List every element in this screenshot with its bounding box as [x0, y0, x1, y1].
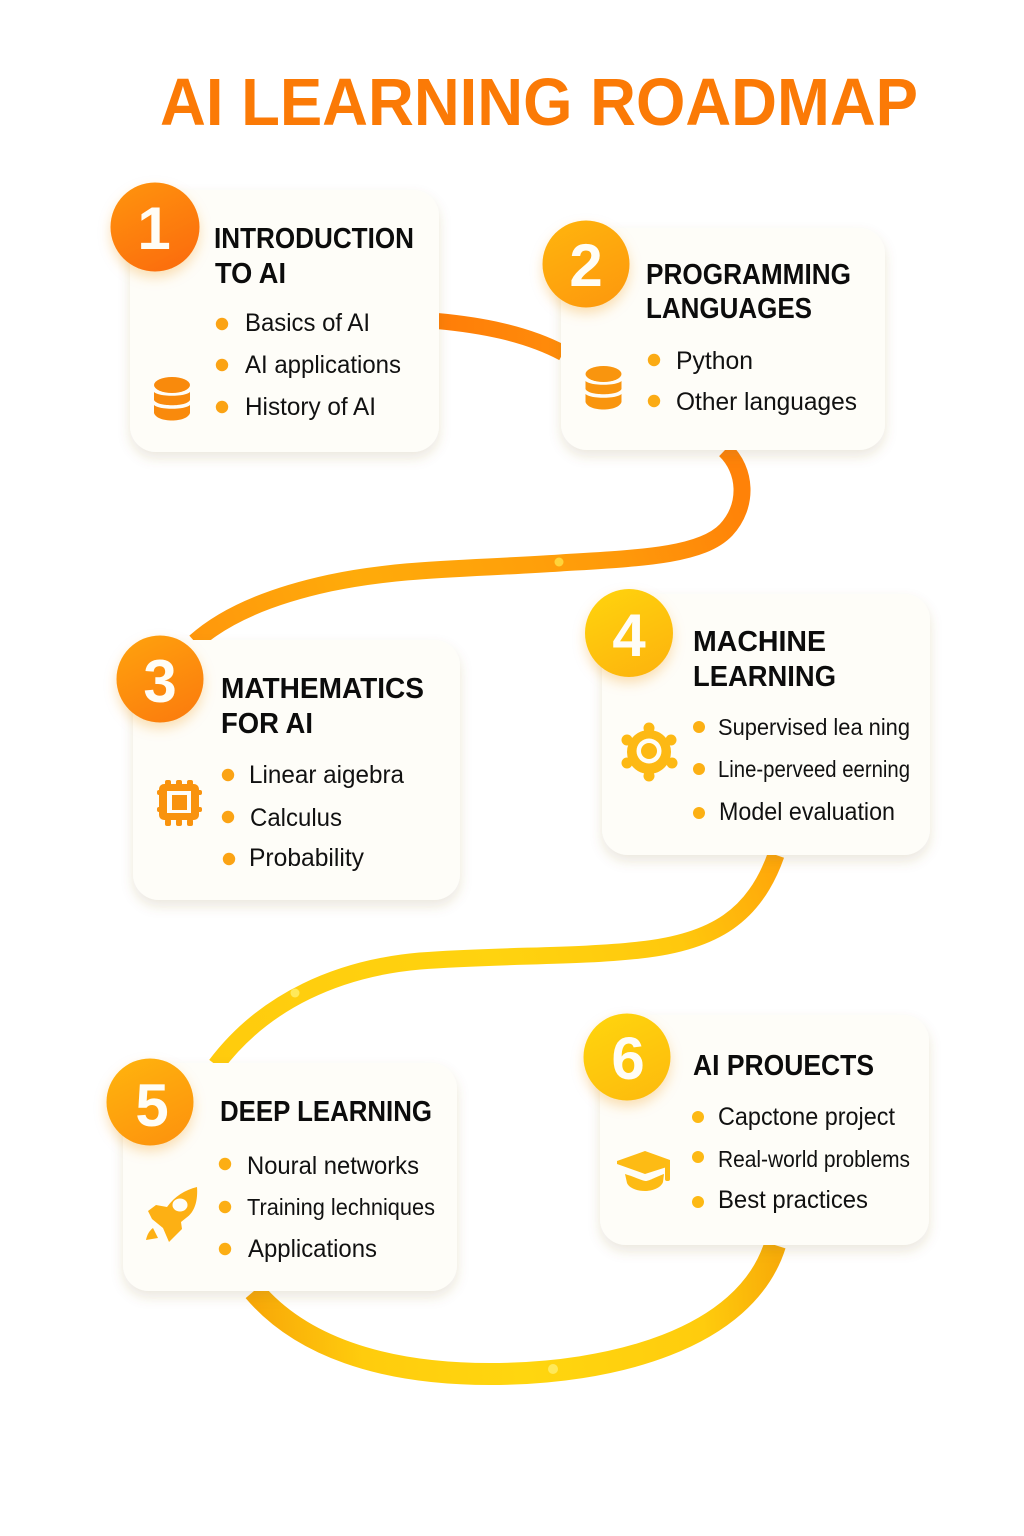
connector: step 2 to step 3 — [195, 450, 742, 642]
badge 1: 1 — [137, 195, 171, 262]
badge 3: 3 — [143, 648, 177, 715]
heading — [221, 673, 424, 740]
badge 2 — [542, 220, 630, 308]
heading: INTRODUCTION — [214, 223, 414, 255]
heading: AI PROUECTS — [693, 1050, 874, 1082]
icon: graduation cap — [617, 1151, 670, 1191]
list — [693, 714, 910, 826]
list: Training lechniques — [247, 1194, 435, 1220]
panel: step 5 deep learning — [106, 1058, 457, 1291]
heading: PROGRAMMING — [646, 259, 851, 291]
panel: step 1 introduction to AI — [110, 182, 439, 452]
panel: step 6 AI projects — [584, 1014, 929, 1245]
icon: database — [154, 377, 190, 420]
list — [216, 309, 401, 421]
list: Linear aigebra — [249, 761, 404, 789]
icon: rocket — [146, 1187, 197, 1242]
list — [692, 1103, 910, 1214]
list: Applications — [248, 1235, 377, 1263]
list: Basics of AI — [245, 309, 370, 337]
list: Supervised lea ning — [718, 714, 910, 740]
list: AI applications — [245, 351, 401, 379]
connector: step 4 to step 5 — [216, 855, 776, 1065]
list: Calculus — [250, 804, 342, 832]
icon: chip — [157, 780, 202, 826]
title: AI LEARNING ROADMAP — [160, 65, 918, 140]
heading: LANGUAGES — [646, 293, 812, 325]
list: Probability — [249, 844, 364, 872]
badge 5: 5 — [135, 1072, 169, 1139]
list: Other languages — [676, 388, 857, 416]
connector: step 5 to step 6 — [254, 1245, 775, 1374]
list: History of AI — [245, 393, 376, 421]
list — [222, 761, 404, 872]
list: Best practices — [718, 1186, 868, 1214]
list: Real-world problems — [718, 1146, 910, 1172]
heading: DEEP LEARNING — [220, 1096, 432, 1128]
badge 6: 6 — [611, 1025, 645, 1092]
badge 3 — [116, 636, 204, 722]
list: Noural networks — [247, 1152, 419, 1180]
list: Line-perveed eerning — [718, 756, 910, 782]
heading: LEARNING — [693, 661, 836, 693]
heading: TO AI — [215, 258, 286, 290]
badge 5 — [106, 1058, 194, 1146]
heading — [214, 223, 414, 290]
heading: MATHEMATICS — [221, 673, 424, 705]
panel: step 3 mathematics for AI — [116, 636, 460, 900]
icon: database — [586, 366, 622, 410]
list — [219, 1152, 435, 1263]
badge 4 — [585, 589, 673, 677]
badge 2: 2 — [569, 232, 603, 299]
list: Python — [676, 347, 753, 375]
panel: step 4 machine learning — [585, 589, 930, 855]
list: Model evaluation — [719, 798, 895, 826]
heading — [693, 626, 836, 693]
heading: FOR AI — [221, 708, 313, 740]
badge 4: 4 — [612, 602, 646, 669]
heading — [646, 259, 851, 325]
badge 6 — [584, 1014, 670, 1100]
icon: gear — [622, 722, 678, 782]
panel: step 2 programming languages — [542, 220, 885, 450]
connector: step 1 to step 2 — [437, 321, 563, 353]
list — [648, 347, 857, 416]
badge 1 — [110, 182, 200, 272]
heading: MACHINE — [693, 626, 826, 658]
list: Capctone project — [718, 1103, 895, 1131]
